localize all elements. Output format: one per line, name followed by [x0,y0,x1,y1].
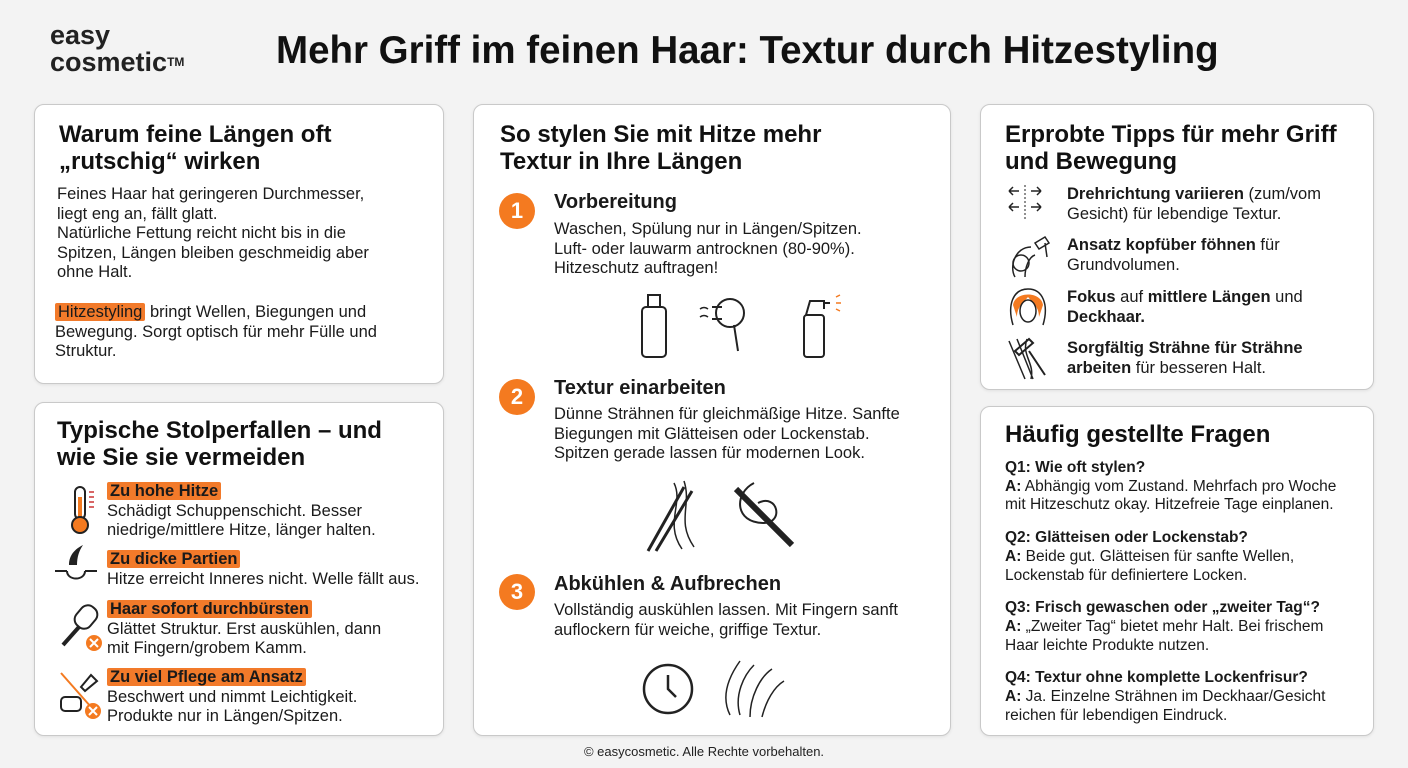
icons: flat iron, curling iron [646,480,794,552]
heading: Textur in Ihre Längen [500,148,742,175]
heading [1005,121,1337,175]
tip 1: Gesicht) für lebendige Textur. [1067,204,1281,222]
item 3: mit Fingern/grobem Kamm. [107,639,307,657]
faq list: A: Ja. Einzelne Strähnen im Deckhaar/Gesicht [1005,688,1325,705]
item 2 [107,550,419,588]
step 3 [499,573,898,718]
step 1: 1 [511,198,523,223]
text block: heat styling: Bewegung. Sorgt optisch für mehr Fülle und [55,322,377,340]
tip 1 [1067,185,1321,222]
footer: © easycosmetic. Alle Rechte vorbehalten. [584,744,824,759]
step 1 [499,191,862,358]
item 1: Zu hohe Hitze [110,482,218,500]
heading: So stylen Sie mit Hitze mehr [500,121,821,148]
tip 2: Grundvolumen. [1067,256,1180,274]
text block: Spitzen, Längen bleiben geschmeidig aber [57,244,369,262]
icon: thermometer [71,486,94,534]
faq list: mit Hitzeschutz okay. Hitzefreie Tage einplanen. [1005,496,1334,513]
step 1: Vorbereitung [554,191,677,213]
step 2: Dünne Strähnen für gleichmäßige Hitze. Sanfte [554,405,900,423]
faq list: Lockenstab für definiertere Locken. [1005,567,1247,584]
tip 3: Fokus auf mittlere Längen und [1067,288,1303,306]
text block [57,185,369,281]
tip 3 [1067,288,1303,326]
item 4: Zu viel Pflege am Ansatz [110,668,303,686]
title: Mehr Griff im feinen Haar: Textur durch Hitzestyling [276,29,1219,72]
step 2: Biegungen mit Glätteisen oder Lockenstab. [554,424,870,442]
panel: tips [980,104,1374,390]
icon: head with orange hair [1010,288,1046,326]
faq list: A: Abhängig vom Zustand. Mehrfach pro Woche [1005,478,1336,495]
step 2: 2 [511,384,523,409]
faq list: reichen für lebendigen Eindruck. [1005,707,1227,724]
icon: comb strands [1008,338,1046,380]
item 3: Haar sofort durchbürsten [110,600,309,618]
logo [50,20,184,77]
faq list: Q2: Glätteisen oder Lockenstab? [1005,529,1248,546]
item 4: Beschwert und nimmt Leichtigkeit. [107,688,357,706]
item 3: Glättet Struktur. Erst auskühlen, dann [107,620,381,638]
text block: Natürliche Fettung reicht nicht bis in die [57,224,346,242]
step 2: Textur einarbeiten [554,377,726,399]
heading [57,417,382,471]
tip 3: Deckhaar. [1067,308,1145,326]
icon: hair follicle [55,545,97,580]
icon: arrows [1008,185,1042,219]
step 2: Spitzen gerade lassen für modernen Look. [554,444,865,462]
step 1: Hitzeschutz auftragen! [554,259,718,277]
step 3: Vollständig auskühlen lassen. Mit Fingern sanft [554,601,898,619]
step 2 [499,377,900,552]
item 2: Zu dicke Partien [110,550,237,568]
faq list: A: „Zweiter Tag“ bietet mehr Halt. Bei frischem [1005,618,1323,635]
text block: ohne Halt. [57,263,132,281]
text block: liegt eng an, fällt glatt. [57,204,218,222]
step 3: 3 [511,579,523,604]
faq list [1005,459,1336,724]
item 3 [107,600,381,657]
icons: clock, hands [642,660,784,718]
faq list: Q3: Frisch gewaschen oder „zweiter Tag“? [1005,599,1320,616]
heading: wie Sie sie vermeiden [57,444,305,471]
step 3: auflockern für weiche, griffige Textur. [554,620,821,638]
item 4 [107,668,357,725]
text block: Feines Haar hat geringeren Durchmesser, [57,185,364,203]
faq list: Haar leichte Produkte nutzen. [1005,637,1209,654]
item 1 [107,482,376,539]
heading: „rutschig“ wirken [59,148,260,175]
step 1: Luft- oder lauwarm antrocknen (80-90%). [554,240,855,258]
heading: Typische Stolperfallen – und [57,417,382,444]
heading: Häufig gestellte Fragen [1005,421,1270,448]
tip 4 [1067,339,1303,376]
tip 2 [1067,236,1280,274]
text block: heat styling [55,303,377,360]
panel: FAQ [980,406,1374,736]
panel: pitfalls [34,402,444,736]
item 4: Produkte nur in Längen/Spitzen. [107,707,343,725]
heading: und Bewegung [1005,148,1177,175]
heading: Warum feine Längen oft [59,121,331,148]
item 2: Hitze erreicht Inneres nicht. Welle fällt aus. [107,570,419,588]
text block: heat styling: Hitzestyling bringt Wellen, Biegungen und [58,303,366,321]
tip 1: Drehrichtung variieren (zum/vom [1067,185,1321,203]
item 1: Schädigt Schuppenschicht. Besser [107,502,362,520]
tip 4: arbeiten für besseren Halt. [1067,358,1266,376]
step 1: Waschen, Spülung nur in Längen/Spitzen. [554,220,862,238]
panel: why slippery [34,104,444,384]
heading [500,121,822,175]
text block: heat styling: Struktur. [55,342,116,360]
heading [59,121,332,175]
faq list: Q1: Wie oft stylen? [1005,459,1145,476]
icon: brush with x [62,604,102,651]
panel: steps [473,104,951,736]
heading: Erprobte Tipps für mehr Griff [1005,121,1337,148]
step 3: Abkühlen & Aufbrechen [554,573,781,595]
logo: easy [50,20,110,50]
icons: bottle, dryer, spray [641,294,841,358]
icon: head dryer [1012,236,1050,278]
tip 2: Ansatz kopfüber föhnen für [1067,236,1280,254]
faq list: A: Beide gut. Glätteisen für sanfte Wellen, [1005,548,1294,565]
faq list: Q4: Textur ohne komplette Lockenfrisur? [1005,669,1308,686]
icon: product with x [60,672,101,719]
tip 4: Sorgfältig Strähne für Strähne [1067,339,1303,357]
item 1: niedrige/mittlere Hitze, länger halten. [107,521,376,539]
logo: cosmeticTM [50,47,184,77]
